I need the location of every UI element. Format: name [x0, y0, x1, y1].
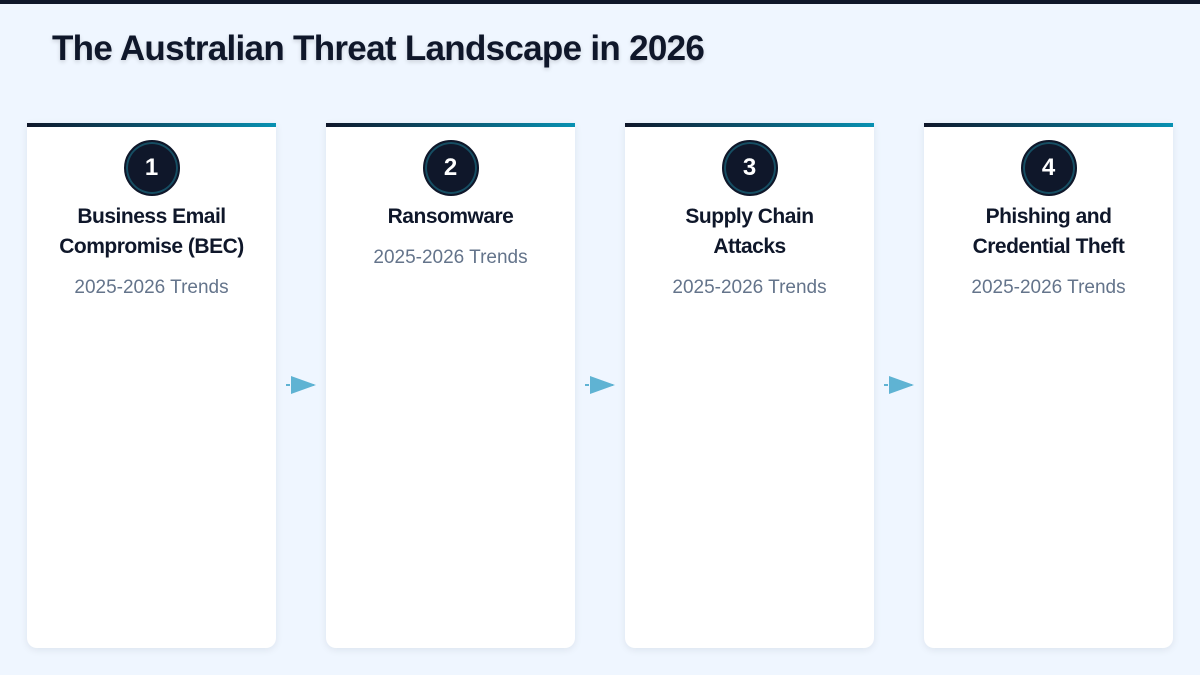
arrow: [884, 376, 914, 394]
heading: Compromise (BEC): [59, 235, 244, 258]
panel: Phishing: [924, 123, 1173, 648]
heading: [685, 205, 814, 258]
panel: Ransomware: [326, 123, 575, 648]
badge 3: [722, 140, 778, 196]
subtitle: 2025-2026 Trends: [74, 277, 229, 298]
arrow: [286, 376, 316, 394]
heading: [973, 205, 1125, 258]
title: The Australian Threat Landscape in 2026: [52, 29, 704, 68]
arrow: [585, 376, 615, 394]
badge 3: 3: [743, 154, 756, 181]
subtitle: 2025-2026 Trends: [373, 247, 528, 268]
badge 2: 2: [444, 154, 457, 181]
heading: Phishing and: [986, 205, 1111, 228]
heading: Attacks: [713, 235, 786, 258]
badge 2: [422, 140, 478, 196]
heading: Supply Chain: [685, 205, 814, 228]
heading: Credential Theft: [973, 235, 1124, 258]
heading: Business Email: [77, 205, 226, 228]
badge 4: 4: [1042, 154, 1055, 181]
badge 4: [1020, 140, 1076, 196]
badge 1: 1: [145, 154, 158, 181]
heading: Ransomware: [388, 205, 513, 228]
heading: [59, 205, 244, 258]
panel: Supply chain: [625, 123, 874, 648]
badge 1: [124, 140, 180, 196]
subtitle: 2025-2026 Trends: [672, 277, 827, 298]
subtitle: 2025-2026 Trends: [971, 277, 1126, 298]
panel: BEC: [27, 123, 276, 648]
